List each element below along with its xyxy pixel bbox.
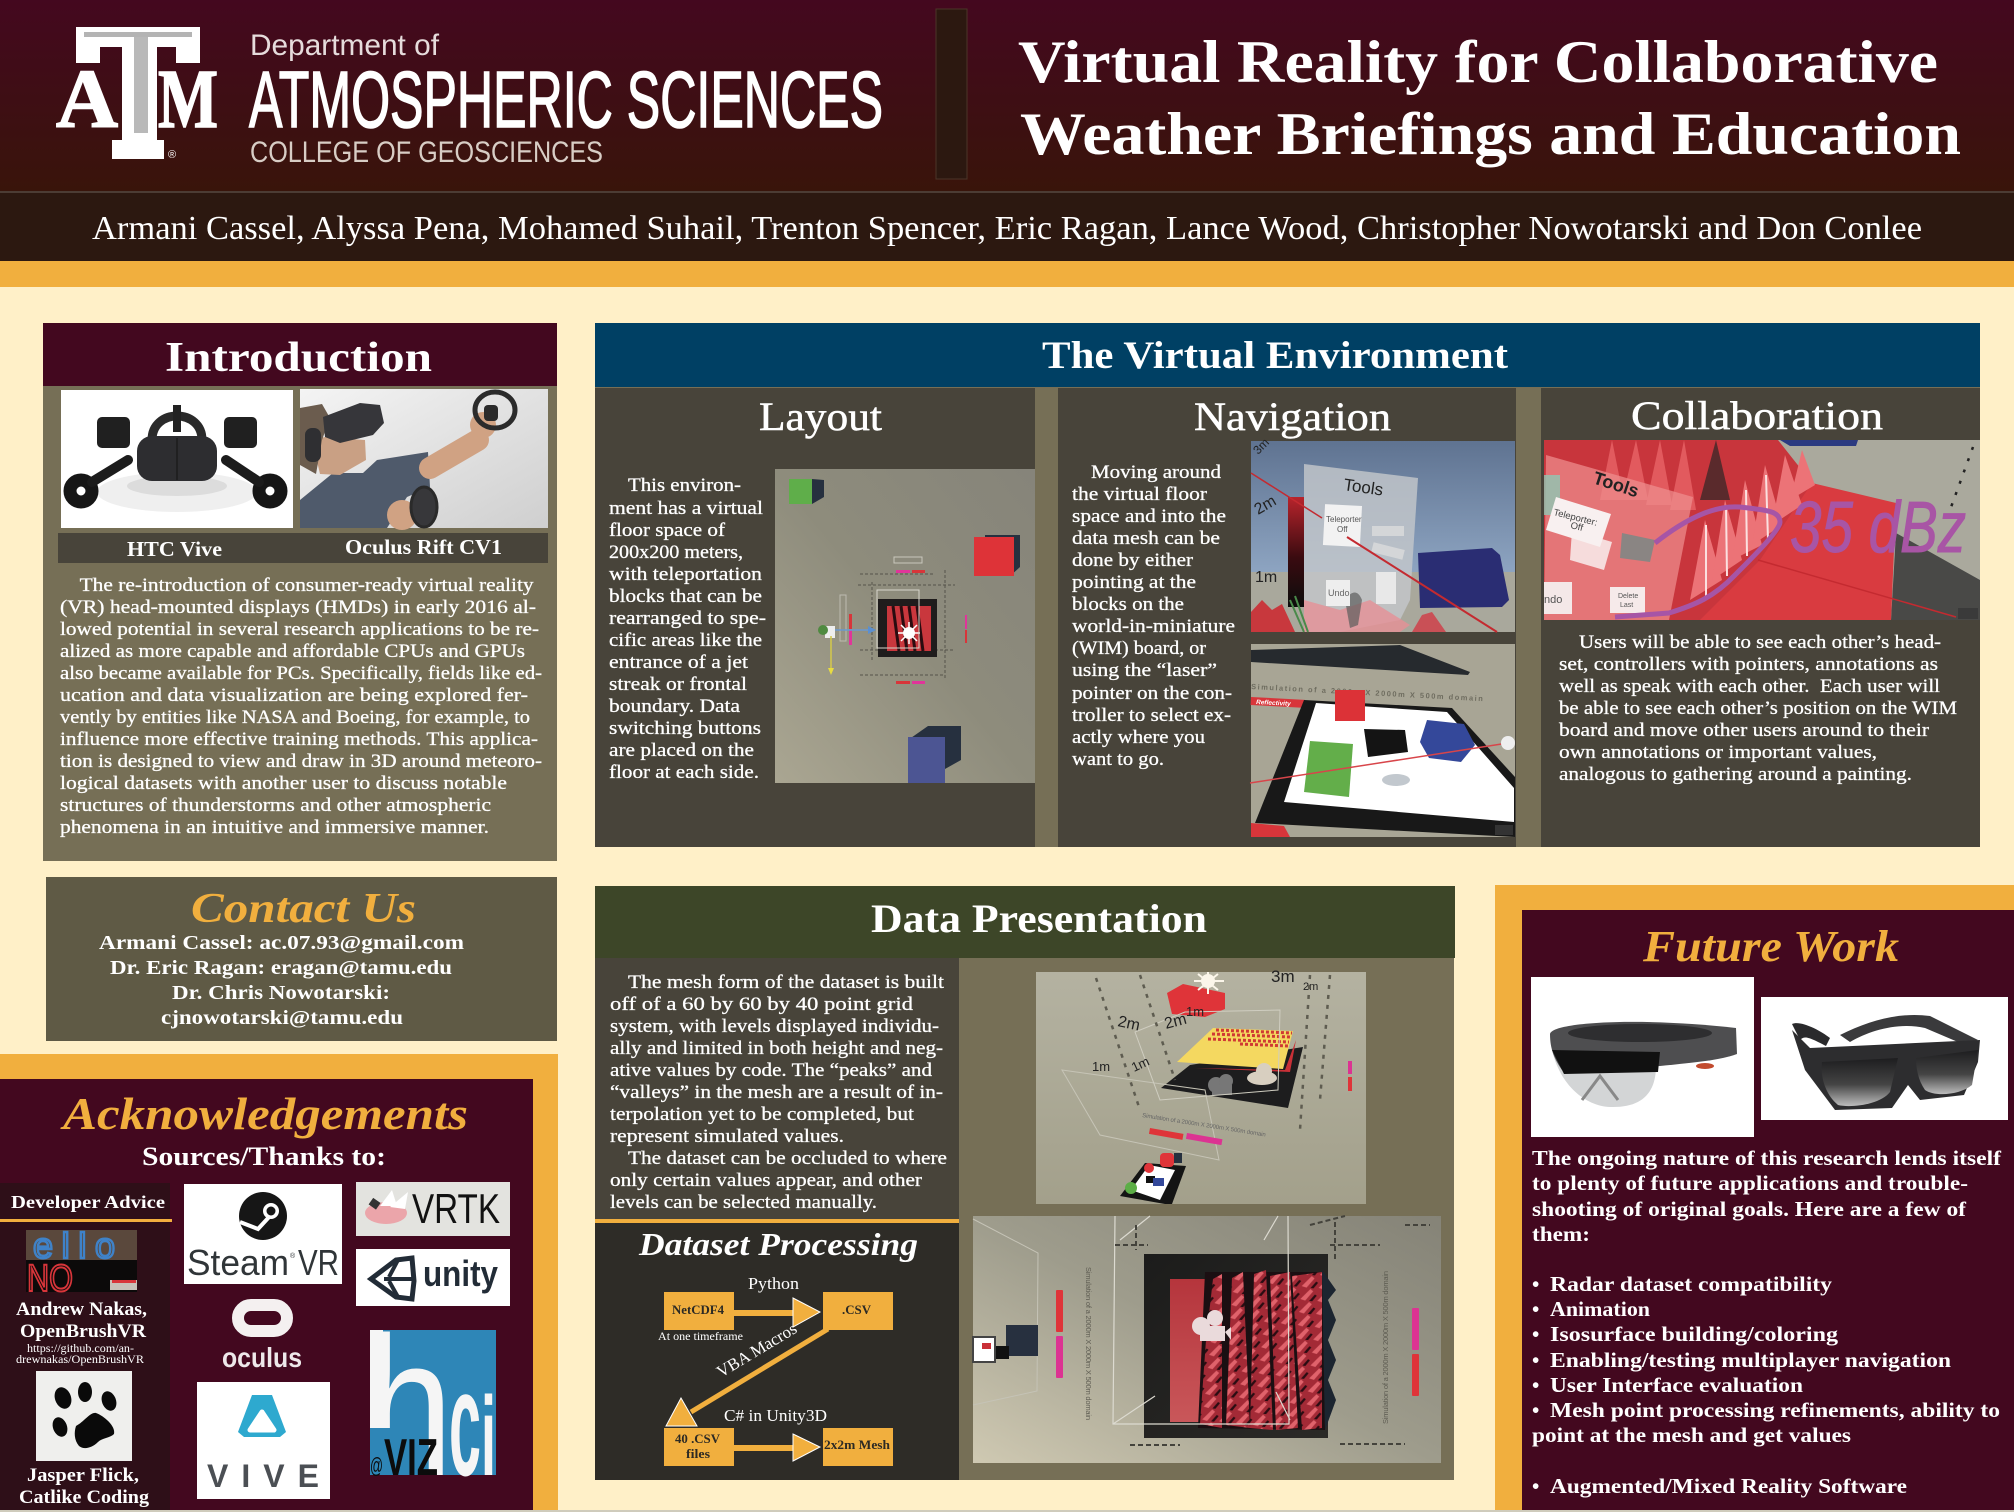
navigation text: space and into the [1072, 506, 1226, 527]
introduction text: (VR) head-mounted displays (HMDs) in early 2016 al- [60, 597, 536, 618]
data screenshot: perspective view of mesh: 1m [1129, 1053, 1152, 1075]
collaboration text: be able to see each other’s position on the WIM [1559, 698, 1957, 719]
logo: VIVE [197, 1382, 330, 1499]
icon: OpenBrushVR screenshot: ello [33, 1225, 115, 1266]
subpanel: dataset processing flowchart: .CSV [842, 1302, 872, 1317]
image captions [58, 533, 548, 563]
arrow: files to mesh [734, 1434, 820, 1461]
credit: Andrew Nakas: Andrew Nakas, [16, 1299, 147, 1320]
collaboration text: set, controllers with pointers, annotations as [1559, 654, 1938, 675]
introduction text: lowed potential in several research applications to be re- [60, 619, 539, 640]
panel: acknowledgements [0, 1054, 558, 1512]
introduction text: also became available for PCs. Specifically, fields like ed- [60, 663, 542, 684]
navigation screenshot: tools panel: Tools [1342, 475, 1384, 499]
future work text: shooting of original goals. Here are a few of [1532, 1197, 1967, 1221]
credit: Jasper Flick: Jasper Flick, [27, 1465, 139, 1486]
panel: data presentation [595, 886, 1455, 1480]
department wordmark: Department of [250, 29, 440, 62]
data presentation text: levels can be selected manually. [610, 1192, 877, 1213]
subpanel: navigation [1058, 388, 1516, 847]
future work text: • [1532, 1272, 1539, 1296]
navigation text: Moving around [1091, 462, 1222, 483]
title: Virtual Reality for Collaborative [1018, 29, 1938, 95]
photo: HTC Vive [61, 390, 293, 528]
navigation screenshot: tools panel: 3m [1250, 435, 1272, 457]
layout text [609, 475, 766, 783]
panel: contact us [46, 877, 557, 1041]
data screenshot: perspective view of mesh: 1m [1092, 1059, 1110, 1074]
icon: paw print [36, 1371, 132, 1461]
header band [0, 0, 2014, 287]
data screenshot: perspective view of mesh: 2m [1116, 1013, 1141, 1035]
data presentation text: only certain values appear, and other [610, 1170, 923, 1191]
introduction text: alized as more capable and affordable CPUs and GPUs [60, 641, 525, 662]
data presentation text: The dataset can be occluded to where [628, 1148, 947, 1169]
future work text: Animation [1550, 1297, 1650, 1321]
data screenshot: overhead view of mesh: Simulation of a 2000m X 2000m X 500m domain [1084, 1267, 1093, 1420]
future work text [1532, 1146, 2002, 1498]
navigation text: data mesh can be [1072, 528, 1220, 549]
layout text: switching buttons [609, 718, 761, 739]
collaboration text: own annotations or important values, [1559, 742, 1877, 763]
page bottom edge [0, 1510, 2014, 1512]
data presentation text: terpolation yet to be completed, but [610, 1104, 915, 1125]
subpanel: dataset processing flowchart: NetCDF4 [672, 1302, 724, 1317]
introduction text: structures of thunderstorms and other atmospheric [60, 795, 491, 816]
header divider block [936, 9, 967, 179]
data presentation text: The mesh form of the dataset is built [628, 972, 945, 993]
panel: the virtual environment [595, 323, 1980, 847]
navigation text: want to go. [1072, 749, 1164, 770]
navigation screenshot: tools panel: Teleporter [1326, 515, 1362, 524]
layout text: are placed on the [609, 740, 754, 761]
contact details: Dr. Chris Nowotarski: [172, 982, 390, 1004]
arrow: CSV to 40 CSV files [666, 1319, 828, 1426]
subheading: sources: Sources/Thanks to: [142, 1142, 386, 1171]
panel: acknowledgements: i [481, 1374, 496, 1499]
subpanel: dataset processing flowchart: Python [748, 1274, 800, 1293]
layout overhead screenshot [775, 469, 1035, 783]
introduction text: vently by entities like NASA and Boeing, for example, to [60, 707, 530, 728]
data screenshot: perspective view of mesh: 2m [1163, 1011, 1189, 1033]
future work text: • [1532, 1398, 1539, 1422]
collaboration screenshot with annotation: Teleporter: [1552, 507, 1598, 529]
heading: the virtual environment: The Virtual Environment [1042, 334, 1508, 377]
logo: SteamVR: Steam [187, 1242, 289, 1283]
data screenshot: overhead view of mesh [973, 1216, 1441, 1463]
layout text: ment has a virtual [609, 498, 763, 519]
arrow: CSV to 40 CSV files: VBA Macros [713, 1319, 800, 1381]
heading: contact us: Contact Us [191, 886, 416, 932]
heading: the virtual environment [595, 323, 1980, 387]
panel: future work [1495, 885, 2014, 1510]
layout text: This environ- [628, 475, 741, 496]
logo: VIVE: VIVE [207, 1458, 319, 1494]
logo: unity [356, 1249, 510, 1306]
subpanel: dataset processing flowchart: Dataset Processing [638, 1226, 918, 1262]
navigation text: (WIM) board, or [1072, 638, 1207, 659]
department wordmark: COLLEGE OF GEOSCIENCES [250, 136, 603, 169]
subpanel: layout: Layout [759, 394, 882, 439]
future work text: • [1532, 1474, 1539, 1498]
navigation text: using the “laser” [1072, 660, 1217, 681]
subpanel: dataset processing flowchart [595, 1219, 959, 1480]
subpanel: dataset processing flowchart: files [686, 1446, 710, 1461]
navigation text: troller to select ex- [1072, 705, 1231, 726]
layout text: floor at each side. [609, 762, 759, 783]
logo: SteamVR: VR [298, 1242, 339, 1283]
future work text: • [1532, 1348, 1539, 1372]
introduction text [60, 575, 542, 838]
logo: Texas A&M [56, 27, 218, 161]
heading: data presentation: Data Presentation [871, 896, 1207, 941]
future work text: Enabling/testing multiplayer navigation [1550, 1348, 1951, 1372]
title: Weather Briefings and Education [1020, 101, 1961, 167]
future work text: Augmented/Mixed Reality Software [1550, 1474, 1907, 1498]
logo: VRTK [356, 1182, 510, 1236]
credit: Jasper Flick: Catlike Coding [19, 1487, 150, 1508]
subpanel: collaboration [1541, 388, 1980, 847]
future work text: • [1532, 1297, 1539, 1321]
heading: introduction [43, 323, 557, 386]
contact details [99, 932, 464, 1029]
layout text: streak or frontal [609, 674, 747, 695]
collaboration screenshot with annotation: ndo [1544, 594, 1562, 606]
introduction text: influence more effective training methods. This applica- [60, 729, 538, 750]
future work text: • [1532, 1373, 1539, 1397]
navigation screenshot: tools panel: Off [1337, 525, 1348, 534]
introduction text: tion is designed to view and draw in 3D around meteoro- [60, 751, 542, 772]
title [1018, 29, 1961, 167]
collaboration text: well as speak with each other. Each user will [1559, 676, 1940, 697]
credit: Andrew Nakas: drewnakas/OpenBrushVR [16, 1354, 144, 1366]
layout text: cific areas like the [609, 630, 762, 651]
subpanel: dataset processing flowchart: 40 .CSV [675, 1431, 721, 1446]
layout text: entrance of a jet [609, 652, 749, 673]
contact details: cjnowotarski@tamu.edu [161, 1007, 403, 1029]
navigation text [1072, 462, 1235, 770]
data screenshot: perspective view of mesh: 1m [1186, 1004, 1204, 1019]
subpanel: dataset processing flowchart: C# in Unity3D [724, 1406, 827, 1425]
navigation screenshot: world in miniature board: Reflectivity [1256, 699, 1291, 708]
data presentation text: system, with levels displayed individu- [610, 1016, 939, 1037]
layout text: boundary. Data [609, 696, 741, 717]
credit: Andrew Nakas: OpenBrushVR [20, 1321, 146, 1342]
logo: VRTK: VRTK [412, 1185, 500, 1232]
contact details: Armani Cassel: ac.07.93@gmail.com [99, 932, 464, 954]
collaboration text [1559, 632, 1957, 785]
navigation screenshot: tools panel: 2m [1252, 493, 1279, 518]
data presentation text: off of a 60 by 60 by 40 point grid [610, 994, 914, 1015]
logo: HCI at VIZ: @ [370, 1453, 383, 1478]
future work text: point at the mesh and get values [1532, 1423, 1851, 1447]
logo: SteamVR: ® [290, 1252, 296, 1260]
collaboration text: analogous to gathering around a painting. [1559, 764, 1912, 785]
future work text: to plenty of future applications and trouble- [1532, 1171, 1968, 1195]
department wordmark [249, 29, 883, 169]
logo: HCI at VIZ: h [365, 1296, 453, 1512]
collaboration screenshot with annotation: 35 dBz [1790, 488, 1966, 568]
data presentation text [595, 958, 959, 1220]
data presentation text: represent simulated values. [610, 1126, 844, 1147]
layout text: with teleportation [609, 564, 763, 585]
future work text: Mesh point processing refinements, ability to [1550, 1398, 2000, 1422]
future work text: The ongoing nature of this research lends itself [1532, 1146, 2002, 1170]
logo: unity: unity [423, 1253, 498, 1294]
navigation text: done by either [1072, 550, 1194, 571]
heading: future work: Future Work [1642, 922, 1899, 971]
photo: ODG smart glasses [1761, 997, 2008, 1120]
introduction text: phenomena in an intuitive and immersive manner. [60, 817, 489, 838]
logo: Texas A&M: ® [168, 149, 176, 161]
future work text: User Interface evaluation [1550, 1373, 1803, 1397]
credit: Andrew Nakas [16, 1299, 147, 1366]
future work text: Isosurface building/coloring [1550, 1322, 1839, 1346]
introduction text: The re-introduction of consumer-ready virtual reality [80, 575, 534, 596]
data presentation text: “valleys” in the mesh are a result of in- [610, 1082, 943, 1103]
panel: introduction [43, 323, 557, 861]
introduction text: logical datasets with another user to discuss notable [60, 773, 507, 794]
collaboration screenshot with annotation [1544, 440, 1980, 620]
credit: Andrew Nakas: https://github.com/an- [27, 1343, 134, 1355]
image captions: HTC Vive [127, 537, 222, 561]
data screenshot: perspective view of mesh: Simulation of a 2000m X 2000m X 500m domain [1142, 1113, 1266, 1139]
navigation screenshot: tools panel: Undo [1328, 588, 1350, 598]
logo: HCI at VIZ: VIZ [384, 1429, 438, 1487]
arrow: NetCDF4 to CSV [734, 1298, 820, 1327]
heading: data presentation [595, 886, 1455, 958]
collaboration screenshot with annotation: Last [1620, 602, 1633, 609]
icon: OpenBrushVR screenshot: NO [27, 1258, 73, 1300]
subpanel: dataset processing flowchart: At one timeframe [658, 1329, 743, 1343]
credit: Jasper Flick [19, 1465, 150, 1508]
navigation text: actly where you [1072, 727, 1206, 748]
collaboration screenshot with annotation: Delete [1618, 593, 1638, 600]
data presentation text: ally and limited in both height and neg- [610, 1038, 943, 1059]
developer advice column: Developer Advice [11, 1192, 165, 1212]
photo: HoloLens headset [1531, 977, 1754, 1137]
contact details: Dr. Eric Ragan: eragan@tamu.edu [110, 957, 452, 979]
collaboration text: Users will be able to see each other’s head- [1579, 632, 1941, 653]
subpanel: layout [595, 388, 1035, 847]
future work text: them: [1532, 1222, 1590, 1246]
collaboration screenshot with annotation: Off [1569, 520, 1584, 534]
logo: Texas A&M: A [56, 53, 118, 146]
navigation screenshot: tools panel: 1m [1255, 569, 1277, 586]
layout text: rearranged to spe- [609, 608, 766, 629]
image captions: Oculus Rift CV1 [345, 535, 502, 559]
layout text: blocks that can be [609, 586, 762, 607]
navigation screenshot: tools panel [1250, 435, 1515, 632]
data screenshot: perspective view of mesh: 3m [1271, 967, 1295, 986]
navigation text: blocks on the [1072, 594, 1184, 615]
navigation text: pointing at the [1072, 572, 1196, 593]
navigation text: pointer on the con- [1072, 683, 1232, 704]
collaboration text: board and move other users around to their [1559, 720, 1930, 741]
navigation screenshot: world in miniature board [1250, 644, 1515, 837]
logo: oculus: oculus [222, 1342, 302, 1373]
subpanel: dataset processing flowchart: 2x2m Mesh [824, 1437, 891, 1452]
photo: Oculus Rift CV1 [300, 389, 548, 530]
layout text: floor space of [609, 520, 726, 541]
subpanel: collaboration: Collaboration [1631, 393, 1883, 438]
navigation text: the virtual floor [1072, 484, 1208, 505]
developer advice column [0, 1183, 172, 1510]
icon: OpenBrushVR screenshot [26, 1225, 137, 1300]
navigation text: world-in-miniature [1072, 616, 1235, 637]
data screenshot: perspective view of mesh [1036, 967, 1366, 1204]
logo: Texas A&M: M [158, 53, 218, 146]
data screenshot: overhead view of mesh: Simulation of a 2000m X 2000m X 500m domain [1381, 1271, 1390, 1424]
layout text: 200x200 meters, [609, 542, 743, 563]
department wordmark: ATMOSPHERIC SCIENCES [249, 55, 883, 144]
future work text: Radar dataset compatibility [1550, 1272, 1833, 1296]
introduction text: ucation and data visualization are being explored fer- [60, 685, 528, 706]
navigation screenshot: world in miniature board: Simulation of a 2000m X 2000m X 500m domain [1251, 682, 1483, 703]
logo: oculus [222, 1305, 302, 1373]
logo: SteamVR [184, 1184, 342, 1284]
heading: introduction: Introduction [165, 335, 432, 381]
collaboration screenshot with annotation: Tools [1591, 468, 1641, 501]
subpanel: navigation: Navigation [1194, 394, 1391, 439]
future work text: • [1532, 1322, 1539, 1346]
authors: Armani Cassel, Alyssa Pena, Mohamed Suhail, Trenton Spencer, Eric Ragan, Lance Wood, Christopher Nowotarski and Don Conlee [92, 210, 1922, 247]
logo: HCI at VIZ: c [449, 1339, 481, 1507]
data presentation text: ative values by code. The “peaks” and [610, 1060, 933, 1081]
data screenshot: perspective view of mesh: 2m [1303, 981, 1318, 993]
heading: acknowledgements: Acknowledgements [60, 1088, 468, 1139]
